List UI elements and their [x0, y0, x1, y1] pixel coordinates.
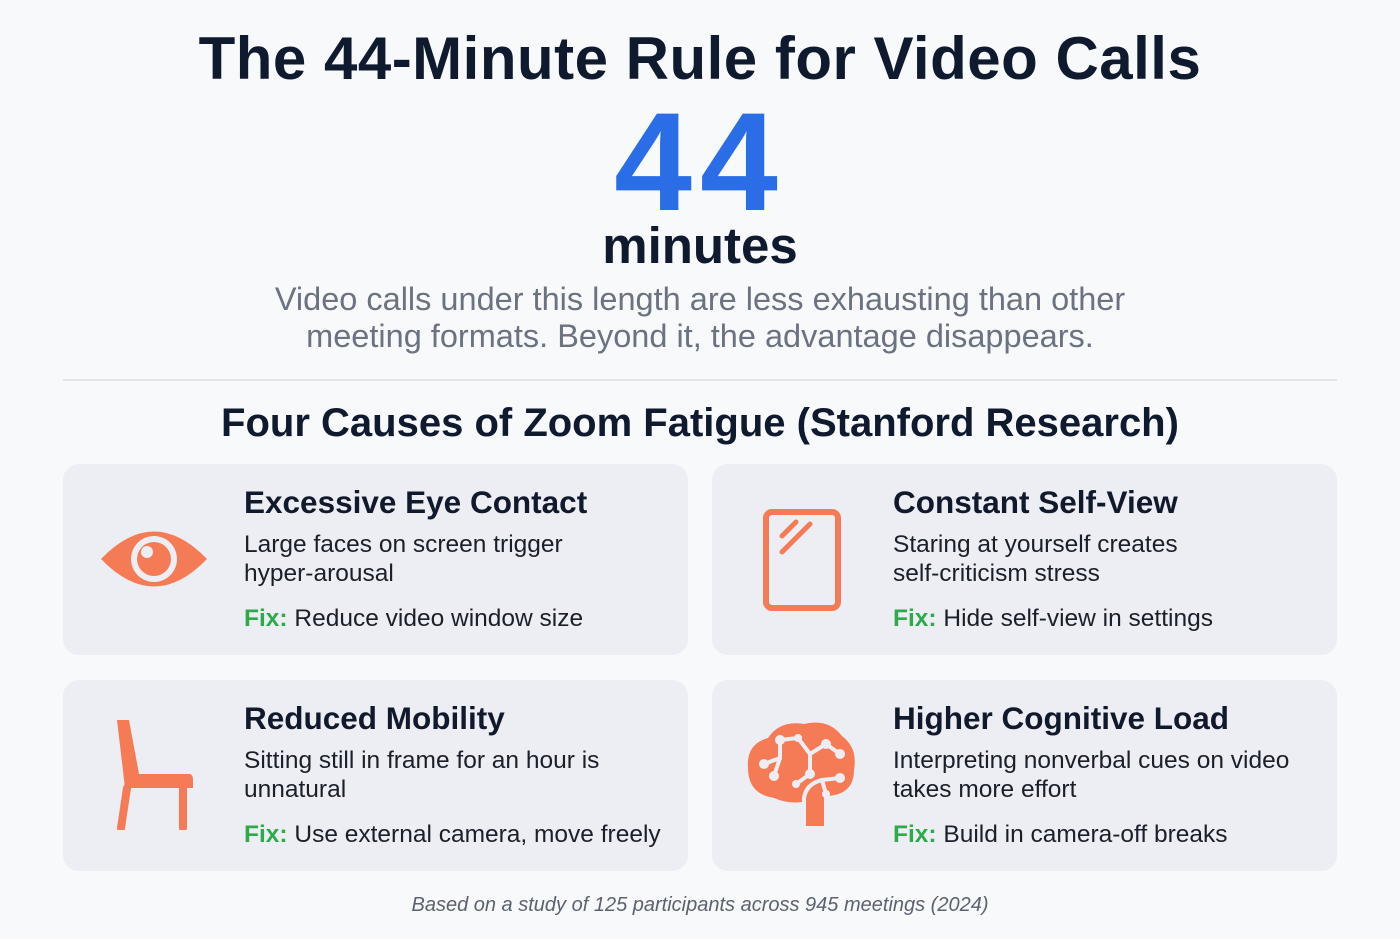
subtitle: Video calls under this length are less exhausting than other	[275, 281, 1125, 317]
panel: cognitive load: takes more effort	[893, 776, 1076, 803]
panel: self-view: Staring at yourself creates	[893, 531, 1178, 558]
panel: mobility: Fix: Use external camera, move freely	[244, 821, 661, 848]
panel: eye contact: hyper-arousal	[244, 560, 394, 587]
panel: cognitive load: Fix: Build in camera-off breaks	[893, 821, 1228, 848]
big number: 44	[614, 83, 786, 240]
panel: mobility	[63, 680, 688, 871]
title: The 44-Minute Rule for Video Calls	[199, 25, 1201, 92]
panel: mobility: Sitting still in frame for an hour is	[244, 747, 599, 774]
panel: eye contact: Large faces on screen trigger	[244, 531, 563, 558]
icon: eye	[101, 532, 207, 586]
subtitle	[275, 281, 1125, 354]
panel: cognitive load: Interpreting nonverbal cues on video	[893, 747, 1289, 774]
icon: chair	[117, 720, 193, 830]
panel: eye contact: Excessive Eye Contact	[244, 484, 587, 520]
panel: self-view	[712, 464, 1337, 655]
section heading: Four Causes of Zoom Fatigue (Stanford Research)	[221, 401, 1179, 445]
footnote: Based on a study of 125 participants across 945 meetings (2024)	[411, 894, 988, 916]
panel: self-view: Fix: Hide self-view in settings	[893, 605, 1213, 632]
minutes label: minutes	[602, 217, 798, 274]
icon: mirror	[763, 509, 841, 611]
panel: eye contact: Fix: Reduce video window size	[244, 605, 583, 632]
panel: eye contact	[63, 464, 688, 655]
panel: cognitive load: Higher Cognitive Load	[893, 700, 1229, 736]
panel: cognitive load	[712, 680, 1337, 871]
icon: brain	[748, 722, 855, 826]
panel: self-view: Constant Self-View	[893, 484, 1178, 520]
subtitle: meeting formats. Beyond it, the advantage disappears.	[306, 318, 1094, 354]
panel: mobility: unnatural	[244, 776, 346, 803]
panel: mobility: Reduced Mobility	[244, 700, 505, 736]
panel: self-view: self-criticism stress	[893, 560, 1100, 587]
